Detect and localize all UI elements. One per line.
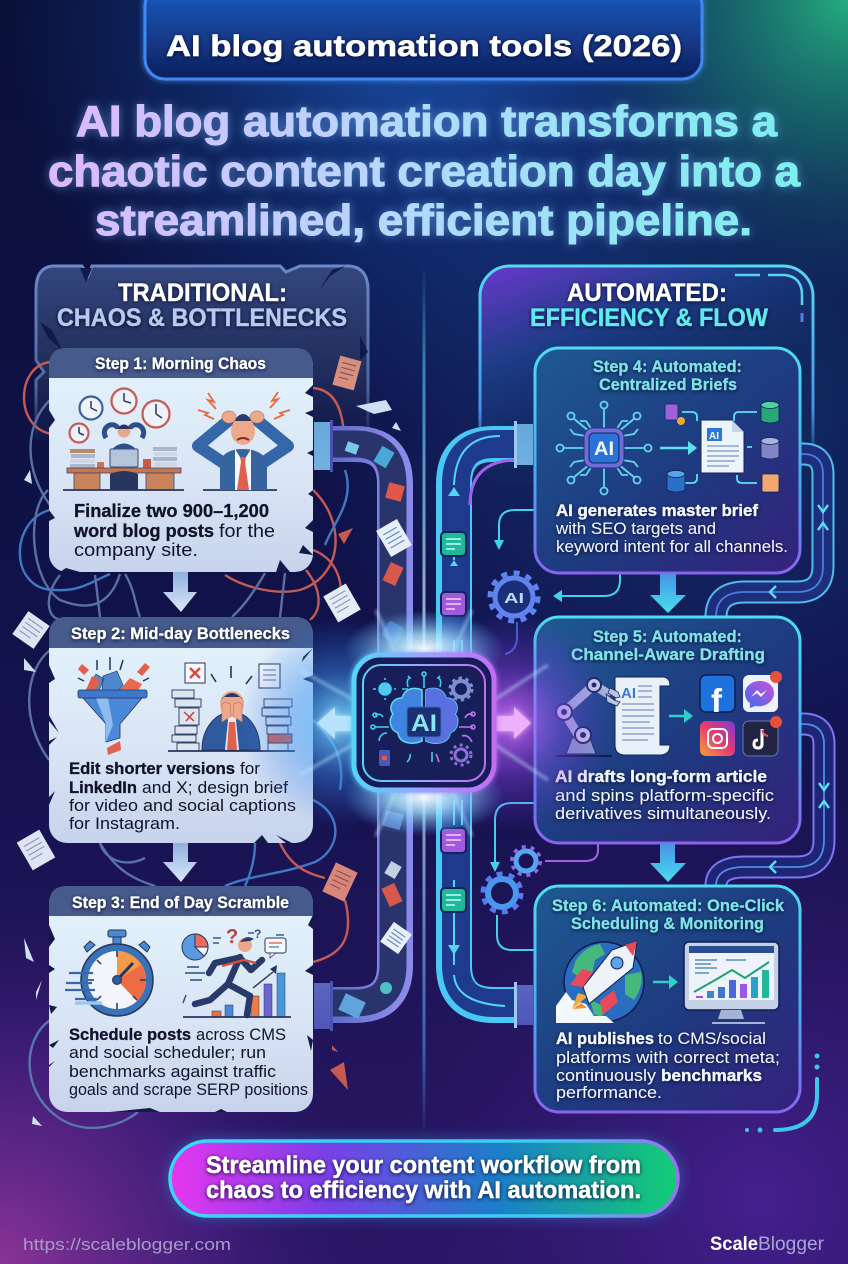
- footer url: https://scaleblogger.com: [23, 1235, 231, 1254]
- panel: automated header: AUTOMATED:: [567, 279, 727, 307]
- card 3 text: Schedule posts: [69, 1025, 191, 1044]
- icon: AI gear: AI: [504, 590, 524, 607]
- flow loops: [490, 454, 829, 950]
- illustration: robot arm, document and social icons: f: [711, 682, 723, 719]
- illustration: AI chip to brief and data: [556, 402, 779, 494]
- illustration: stopwatch and running businessman: ?: [226, 926, 238, 948]
- panel: automated header: EFFICIENCY & FLOW: [530, 304, 768, 332]
- card 6 text: benchmarks: [661, 1066, 762, 1085]
- card 6: scheduling and monitoring: Step 6: Automated: One-Click: [552, 897, 785, 915]
- illustration: stopwatch and running businessman: [65, 926, 291, 1017]
- arrow: step 4 to 5: [650, 573, 686, 613]
- arrow: to automated: [492, 707, 531, 739]
- illustration: AI chip to brief and data: AI: [594, 439, 614, 460]
- card 6 text: continuously: [556, 1066, 657, 1085]
- icon: AI gear: [490, 573, 538, 621]
- icon: small gears: [483, 847, 540, 912]
- headline: chaotic content creation day into a: [48, 147, 801, 196]
- card 2 text: for Instagram.: [69, 814, 180, 833]
- card 1: morning chaos: [49, 348, 313, 572]
- central AI hub: [240, 610, 615, 836]
- panel: traditional header: TRADITIONAL:: [118, 279, 287, 307]
- pipe: automated: [441, 421, 533, 1028]
- card 4: centralized briefs: [535, 348, 800, 573]
- card 5 text: AI drafts long-form article: [555, 767, 767, 786]
- card 3 text: [69, 1025, 308, 1099]
- arrow: step 5 to 6: [650, 843, 686, 882]
- card 1: morning chaos: Step 1: Morning Chaos: [95, 355, 266, 373]
- card 6 text: [556, 1029, 780, 1102]
- card 1 text: company site.: [74, 540, 198, 560]
- card 5: channel-aware drafting: Step 5: Automated:: [593, 628, 742, 646]
- icon: AI brain: AI: [411, 710, 437, 737]
- card 4: centralized briefs: Centralized Briefs: [599, 376, 737, 394]
- arrow: step 2 to 3: [163, 843, 197, 882]
- call to action: chaos to efficiency with AI automation.: [206, 1177, 641, 1204]
- card 4: centralized briefs: Step 4: Automated:: [593, 358, 742, 376]
- card 4 text: AI generates master brief: [556, 501, 758, 520]
- card 4 text: with SEO targets and: [555, 519, 716, 538]
- card 2: mid-day bottlenecks: Step 2: Mid-day Bottlenecks: [71, 625, 290, 643]
- card 2 text: for video and social captions: [69, 796, 296, 815]
- illustration: funnel and stressed worker: [78, 657, 295, 755]
- card 3 text: and social scheduler; run: [69, 1043, 266, 1062]
- card 6: scheduling and monitoring: [535, 886, 800, 1112]
- headline: streamlined, efficient pipeline.: [95, 196, 752, 245]
- title banner: [145, 0, 702, 79]
- card 5 text: derivatives simultaneously.: [555, 804, 771, 823]
- footer logo: Scale: [710, 1234, 758, 1255]
- illustration: robot arm, document and social icons: [556, 671, 782, 756]
- card 3 text: benchmarks against traffic: [69, 1062, 277, 1081]
- tangled lines: [20, 362, 348, 1128]
- card 1 text: [73, 501, 275, 560]
- title banner: AI blog automation tools (2026): [166, 30, 682, 63]
- card 1 text: Finalize two 900–1,200: [74, 501, 269, 521]
- call to action: Streamline your content workflow from: [206, 1152, 641, 1179]
- card 2 text: and X; design brief: [142, 778, 288, 797]
- card 2 text: LinkedIn: [69, 778, 137, 797]
- card 4 text: [555, 501, 788, 556]
- card 2 text: [69, 759, 296, 833]
- card 2 text: Edit shorter versions: [69, 759, 235, 778]
- headline: AI blog automation transforms a: [76, 97, 778, 146]
- card 6 text: performance.: [556, 1083, 662, 1102]
- card 5: channel-aware drafting: Channel-Aware Drafting: [571, 646, 765, 664]
- card 2: mid-day bottlenecks: [49, 617, 313, 843]
- card 3: end of day scramble: [49, 886, 313, 1112]
- call to action: [170, 1141, 678, 1216]
- footer logo: [710, 1234, 825, 1255]
- arrow: to traditional: [317, 707, 354, 739]
- card 2 text: for: [240, 759, 260, 778]
- decorative corner flow: [745, 1054, 820, 1132]
- footer logo: Blogger: [758, 1234, 825, 1255]
- card 3 text: goals and scrape SERP positions: [69, 1080, 308, 1099]
- card 6 text: to CMS/social: [658, 1029, 766, 1048]
- card 1 text: for the: [219, 521, 275, 541]
- illustration: robot arm, document and social icons: AI: [621, 685, 636, 702]
- center glow line: [422, 265, 426, 1135]
- card 6 text: AI publishes: [556, 1029, 654, 1048]
- arrow: step 1 to 2: [163, 572, 197, 612]
- illustration: rocket launch and analytics monitor: [556, 941, 779, 1023]
- card 4 text: keyword intent for all channels.: [556, 537, 788, 556]
- card 3: end of day scramble: Step 3: End of Day Scramble: [72, 894, 289, 912]
- pipe: traditional: [314, 420, 412, 1031]
- card 5: channel-aware drafting: [535, 617, 800, 843]
- illustration: AI chip to brief and data: AI: [709, 431, 719, 442]
- floating papers and shards: [12, 356, 401, 1126]
- panel: automated header: [480, 266, 813, 486]
- panel: traditional header: [36, 266, 368, 440]
- card 6: scheduling and monitoring: Scheduling & Monitoring: [571, 915, 764, 933]
- card 1 text: word blog posts: [73, 521, 214, 541]
- card 5 text: [555, 767, 775, 823]
- panel: traditional header: CHAOS & BOTTLENECKS: [57, 304, 347, 332]
- illustration: overwhelmed at desk with clocks: [63, 388, 290, 490]
- card 5 text: and spins platform-specific: [555, 786, 775, 805]
- card 3 text: across CMS: [196, 1025, 286, 1044]
- headline: [48, 97, 801, 245]
- icon: AI brain: [371, 672, 475, 766]
- card 6 text: platforms with correct meta;: [556, 1048, 780, 1067]
- illustration: stopwatch and running businessman: ?: [254, 927, 261, 941]
